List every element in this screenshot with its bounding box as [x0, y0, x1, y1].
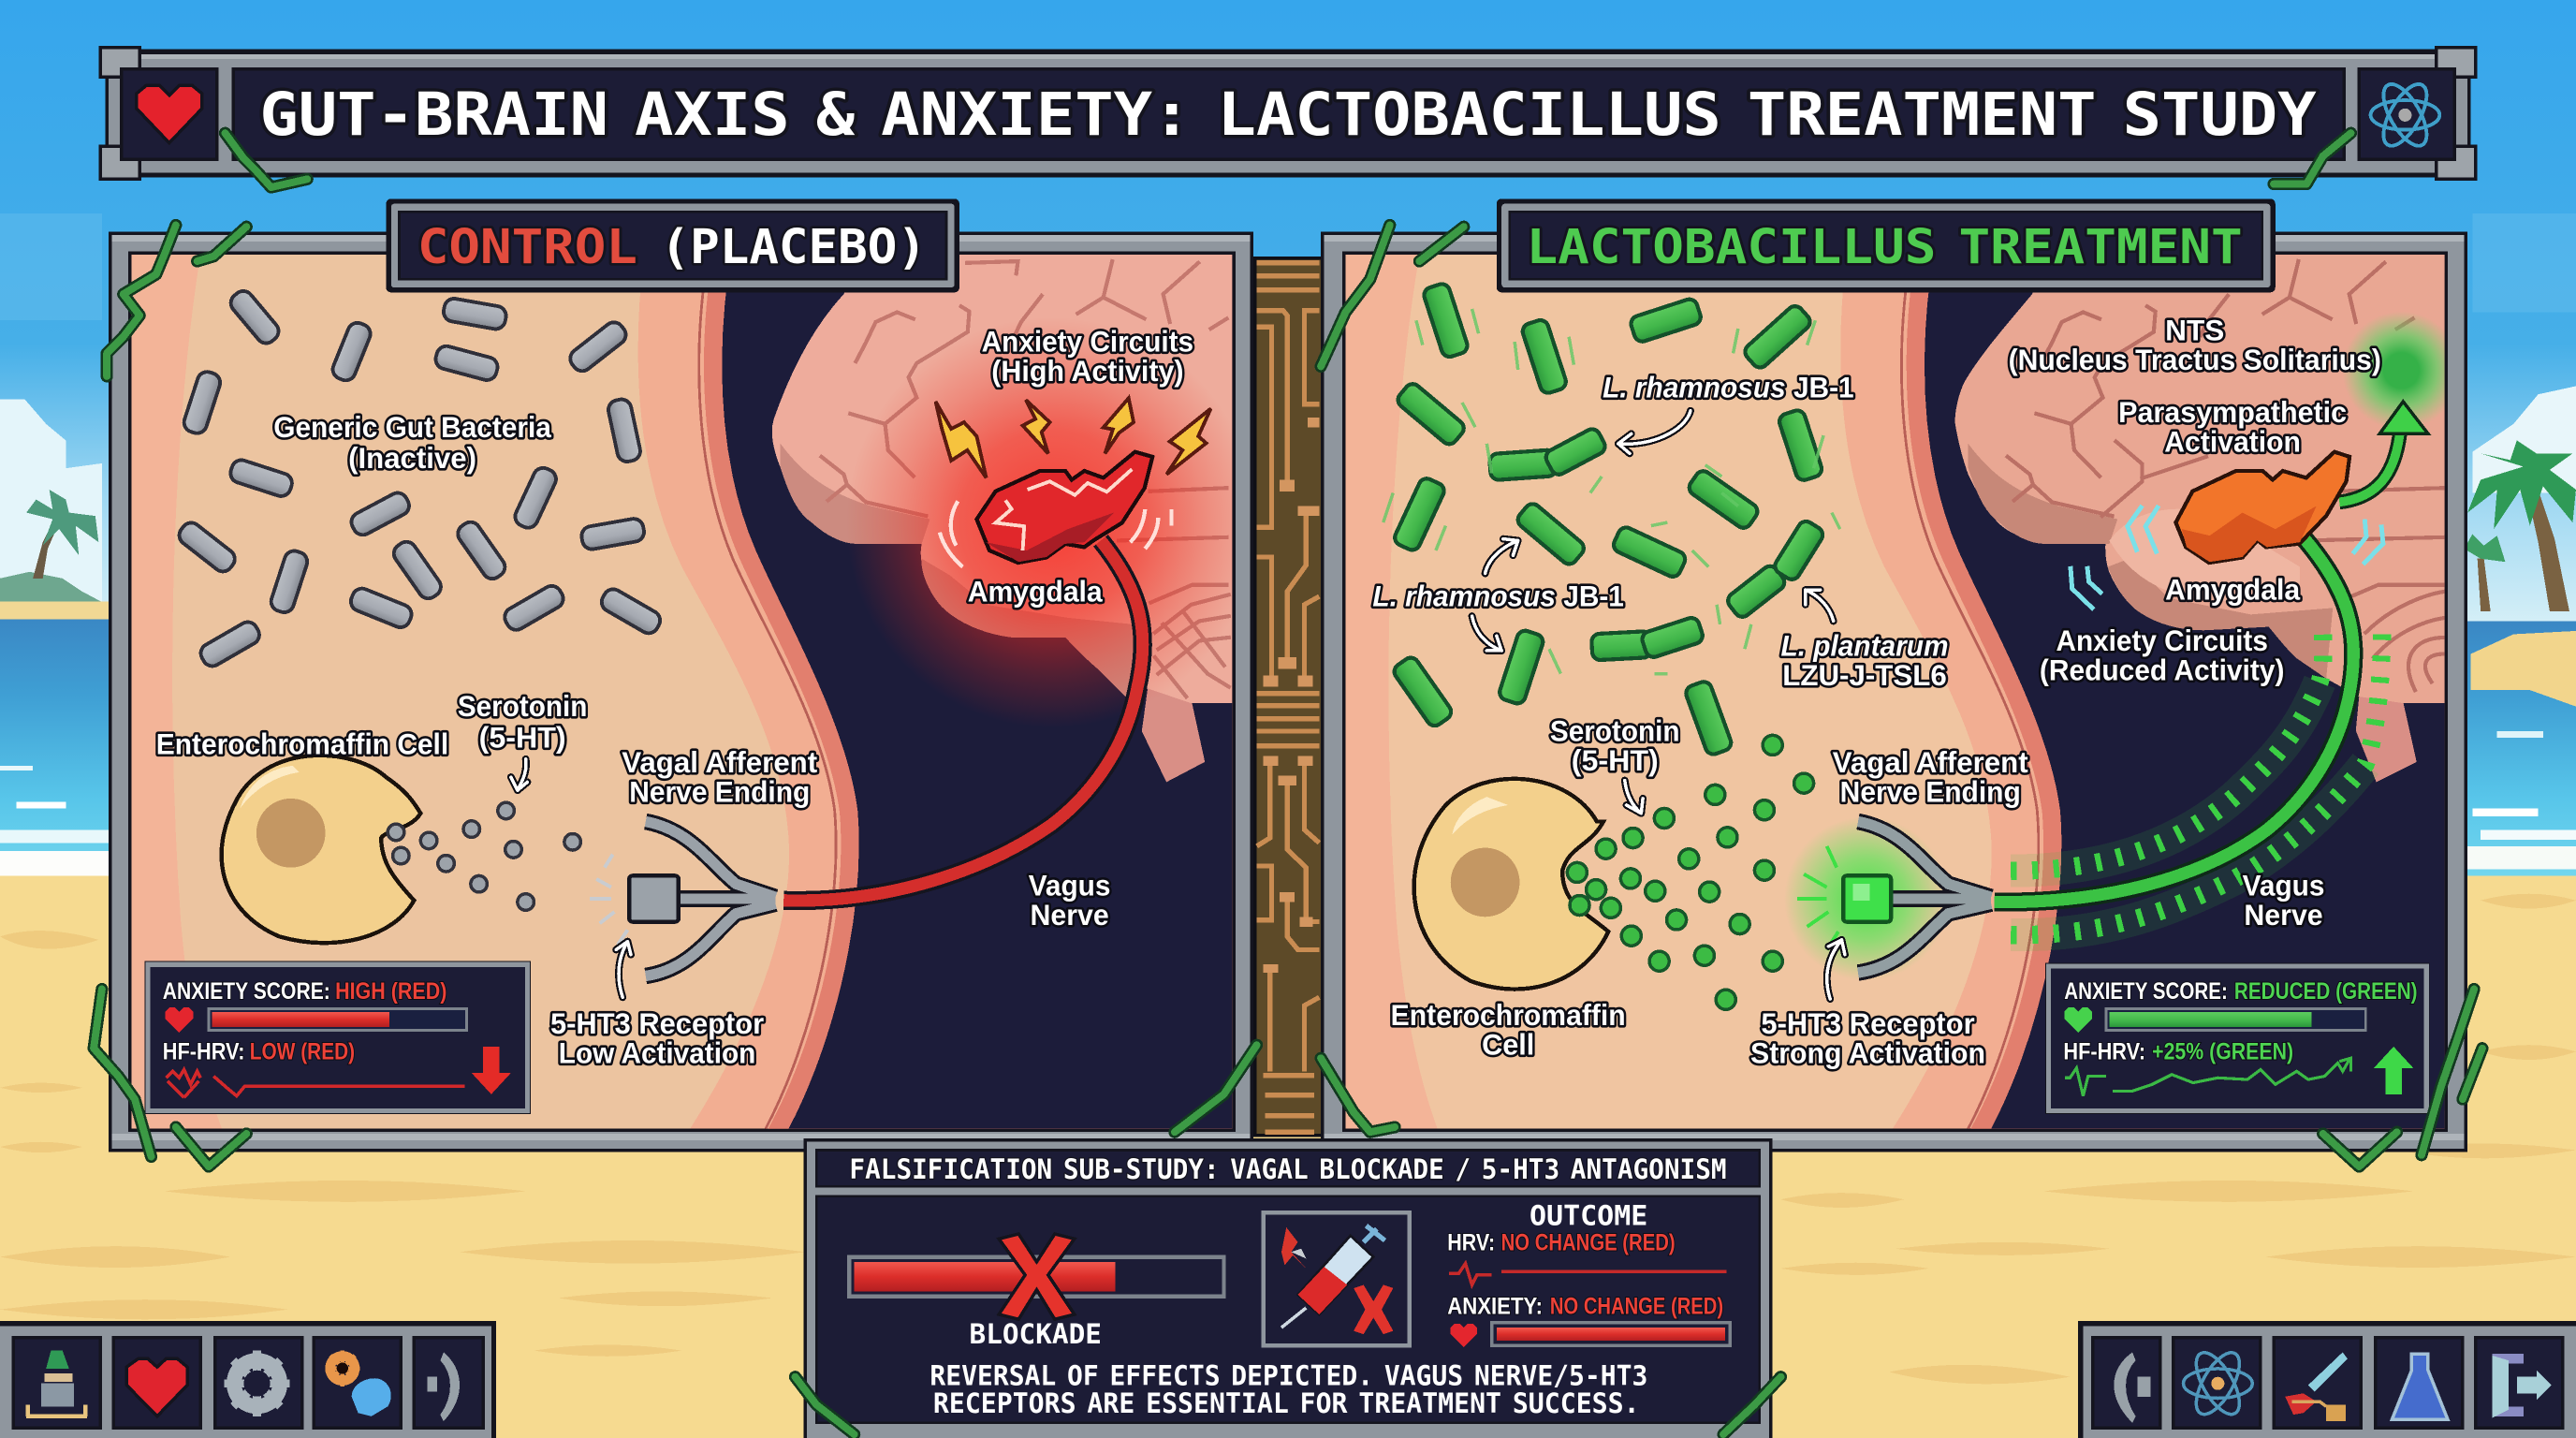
stats box: control: HIGH (RED) — [335, 979, 446, 1005]
labels: treatment — [1372, 313, 2381, 1070]
labels: treatment: Cell — [1482, 1028, 1534, 1062]
circuit connector between panels — [1251, 257, 1325, 1137]
serotonin particles: abundant — [1567, 735, 1814, 1009]
labels: control: (5-HT) — [479, 721, 566, 755]
stats box: treatment: REDUCED (GREEN) — [2234, 979, 2418, 1005]
icon: tower — [26, 1351, 87, 1416]
labels: treatment: (Reduced Activity) — [2040, 653, 2284, 687]
panel: falsification sub-study — [803, 1138, 1773, 1438]
header tab: control — [386, 198, 959, 292]
vagus signal dashes — [2011, 624, 2382, 935]
icon: outcome heart — [1451, 1324, 1477, 1347]
gut bacteria: inactive gray — [175, 287, 664, 669]
icon: red down arrow — [472, 1047, 511, 1094]
labels: control: Generic Gut Bacteria — [273, 410, 551, 444]
enterochromaffin cell: treatment — [1414, 779, 1608, 990]
icon: orange gear and blue slime — [326, 1351, 391, 1416]
labels: treatment: 5-HT3 Receptor — [1761, 1006, 1975, 1040]
nts glow — [2345, 314, 2445, 425]
labels: treatment: Parasympathetic — [2118, 395, 2347, 429]
blockade bar — [849, 1257, 1224, 1297]
amygdala glow: high activity — [856, 330, 1232, 720]
header tab: treatment — [1497, 198, 2276, 292]
labels: control: Enterochromaffin Cell — [156, 727, 448, 761]
brain: control — [772, 246, 1240, 782]
icon: atom — [2183, 1346, 2252, 1421]
stats box: control: ANXIETY SCORE: — [163, 979, 330, 1005]
motion ticks around bacteria — [1383, 309, 1840, 674]
parasympathetic arrow: green — [2339, 402, 2428, 502]
labels: control: (Inactive) — [348, 441, 476, 475]
conclusion text: RECEPTORS ARE ESSENTIAL FOR TREATMENT SUCCESS. — [933, 1387, 1640, 1419]
blockade label: BLOCKADE — [970, 1318, 1102, 1350]
arrows: treatment labels — [1472, 411, 1845, 999]
header tab: treatment: LACTOBACILLUS TREATMENT — [1526, 220, 2243, 275]
icon: green up arrow — [2374, 1047, 2413, 1094]
labels: treatment: Vagal Afferent — [1833, 745, 2028, 779]
outcome block: ANXIETY: — [1447, 1294, 1543, 1319]
labels: control: Vagal Afferent — [622, 745, 818, 779]
labels: control: Vagus — [1029, 868, 1110, 902]
icon: right arrow arc — [427, 1352, 460, 1421]
labels: treatment: (Nucleus Tractus Solitarius) — [2009, 343, 2381, 376]
arrows: control labels — [511, 759, 631, 997]
serotonin particles: sparse — [388, 802, 580, 910]
labels: treatment: Vagus — [2243, 868, 2324, 902]
anxiety bar: full — [1492, 1323, 1730, 1345]
header tab: control: CONTROL — [417, 220, 637, 275]
labels: control: Low Activation — [559, 1036, 755, 1070]
toolbar: left inventory — [0, 1321, 496, 1438]
icon: green heart — [2064, 1007, 2092, 1033]
icons: lightning bolts — [936, 398, 1211, 477]
stats box: treatment: HF-HRV: — [2063, 1039, 2145, 1064]
labels: treatment: Nerve Ending — [1840, 774, 2021, 808]
labels: treatment: L. plantarum — [1781, 628, 1949, 662]
labels: control: Serotonin — [458, 689, 587, 723]
nerve ending fork: gray — [590, 822, 775, 976]
conclusion text: REVERSAL OF EFFECTS DEPICTED. VAGUS NERVE/5-HT3 — [929, 1359, 1647, 1391]
stats box: control: LOW (RED) — [250, 1039, 355, 1064]
icon: left arrow arc — [2114, 1352, 2150, 1423]
header tab: control: (PLACEBO) — [661, 220, 927, 275]
labels: treatment: NTS — [2165, 313, 2224, 346]
stats box: treatment: +25% (GREEN) — [2152, 1039, 2293, 1064]
labels: treatment: Nerve — [2244, 898, 2323, 932]
icon: title heart — [137, 85, 202, 143]
labels: treatment: Anxiety Circuits — [2056, 624, 2268, 657]
outcome block: NO CHANGE (RED) — [1501, 1231, 1676, 1256]
vagus nerve: red — [783, 540, 1143, 901]
anxiety bar: reduced — [2106, 1009, 2365, 1030]
icon: exit door — [2492, 1354, 2552, 1418]
icon: sword and pouch — [2285, 1352, 2348, 1421]
icon: toolbar heart — [126, 1358, 187, 1416]
gut and brain scene: control — [131, 246, 1257, 1129]
icon: blockade x — [999, 1234, 1075, 1319]
panel frame: treatment — [1321, 231, 2467, 1152]
stats box: control: HF-HRV: — [163, 1039, 245, 1064]
enterochromaffin cell: control — [222, 756, 420, 943]
labels: treatment: L. rhamnosus JB-1 — [1603, 371, 1854, 404]
labels: control: Anxiety Circuits — [982, 325, 1193, 359]
outcome block — [1447, 1199, 1730, 1347]
toolbar: right inventory — [2078, 1321, 2576, 1438]
labels: control: Amygdala — [968, 574, 1103, 608]
stats box: control — [145, 961, 531, 1114]
labels: treatment: Amygdala — [2165, 573, 2301, 607]
gut and brain scene: treatment — [1345, 246, 2465, 1129]
panel: lactobacillus treatment — [1321, 231, 2467, 1152]
labels: treatment: Serotonin — [1550, 714, 1680, 748]
hrv trace: rising — [2065, 1058, 2351, 1096]
labels: treatment: L. rhamnosus JB-1 — [1372, 580, 1624, 613]
brain: treatment — [1955, 246, 2456, 782]
labels: control: Nerve — [1030, 898, 1109, 932]
icon: syringe box — [1264, 1212, 1410, 1345]
anxiety bar: high — [209, 1009, 466, 1030]
labels: control: Nerve Ending — [629, 774, 810, 808]
panel frame: control — [109, 231, 1253, 1152]
icon: gear — [224, 1351, 290, 1416]
amygdala: calmed — [2175, 452, 2349, 563]
receptor glow — [1784, 816, 1949, 981]
hrv trace: low — [166, 1070, 465, 1097]
labels: treatment: Activation — [2164, 425, 2301, 459]
labels: control — [156, 325, 1193, 1070]
sub-study heading: FALSIFICATION SUB-STUDY: VAGAL BLOCKADE / 5-HT3 ANTAGONISM — [849, 1153, 1727, 1185]
title bar — [100, 48, 2476, 179]
amygdala: overactive — [940, 452, 1171, 566]
icon: flask — [2392, 1354, 2448, 1419]
icon: title atom — [2371, 78, 2439, 153]
calming arcs: cyan — [2071, 506, 2383, 609]
labels: treatment: Enterochromaffin — [1391, 998, 1626, 1032]
labels: control: (High Activity) — [991, 354, 1184, 388]
outcome block: HRV: — [1447, 1231, 1495, 1256]
lactobacillus: active green — [1391, 282, 1825, 756]
outcome block: NO CHANGE (RED) — [1550, 1294, 1723, 1319]
panel: control (placebo) — [109, 231, 1257, 1152]
labels: treatment: Strong Activation — [1750, 1036, 1985, 1070]
title text: GUT-BRAIN AXIS & ANXIETY: LACTOBACILLUS TREATMENT STUDY — [259, 80, 2317, 149]
labels: treatment: (5-HT) — [1572, 743, 1659, 777]
nerve ending fork: activated — [1797, 822, 1991, 973]
labels: control: 5-HT3 Receptor — [550, 1006, 764, 1040]
outcome block: OUTCOME — [1530, 1199, 1647, 1231]
labels: treatment: LZU-J-TSL6 — [1782, 658, 1947, 692]
stats box: treatment — [2045, 962, 2430, 1114]
hrv trace: flat — [1449, 1264, 1727, 1284]
icon: heart — [165, 1007, 193, 1033]
stats box: treatment: ANXIETY SCORE: — [2064, 979, 2228, 1005]
conclusion text — [929, 1359, 1647, 1419]
vagus nerve: green — [1995, 537, 2353, 902]
